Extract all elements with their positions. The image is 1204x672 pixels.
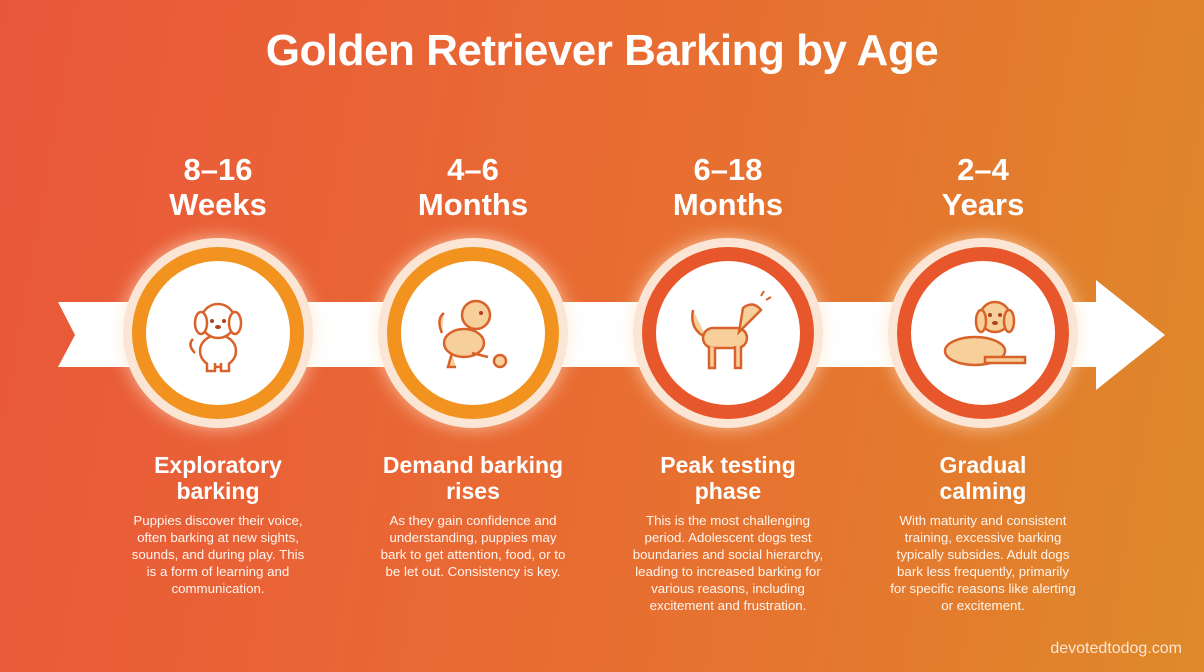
text 3: period. Adolescent dogs test [644,530,812,545]
heading 3: Peak testing [660,452,796,478]
text 2: understanding, puppies may [389,530,557,545]
heading 4: Gradual [940,452,1026,478]
text 1: sounds, and during play. This [132,547,304,562]
text 3: various reasons, including [651,581,805,596]
age label 3: Months [673,187,783,222]
text 1: often barking at new sights, [137,530,299,545]
age label 2: 4–6 [447,152,499,187]
heading 2: rises [446,478,500,504]
text 4: for specific reasons like alerting [890,581,1076,596]
heading 4: calming [940,478,1026,504]
text 4 [890,513,1076,613]
brand: devotedtodog.com [1050,640,1182,657]
circle 2: playing puppy [378,238,568,428]
age label 1: 8–16 [184,152,252,187]
circle 4: lying dog [888,238,1078,428]
text 1: Puppies discover their voice, [133,513,303,528]
age label 4: 2–4 [957,152,1009,187]
age label 3: 6–18 [694,152,762,187]
text 2: be let out. Consistency is key. [386,564,560,579]
age label 2: Months [418,187,528,222]
age label 4 [942,152,1024,222]
heading 3: phase [695,478,761,504]
heading 2: Demand barking [383,452,563,478]
title: Golden Retriever Barking by Age [266,26,938,75]
text 3: boundaries and social hierarchy, [633,547,823,562]
text 3 [633,513,823,613]
text 1 [132,513,304,596]
heading 1: Exploratory [154,452,282,478]
text 3: excitement and frustration. [650,598,806,613]
text 2 [381,513,565,579]
text 3: leading to increased barking for [635,564,821,579]
age label 3 [673,152,783,222]
text 1: is a form of learning and [147,564,289,579]
age label 1 [169,152,267,222]
heading 3 [660,452,796,504]
age label 4: Years [942,187,1024,222]
text 4: or excitement. [941,598,1025,613]
text 4: typically subsides. Adult dogs [897,547,1069,562]
heading 2 [383,452,563,504]
text 4: With maturity and consistent [899,513,1067,528]
heading 1 [154,452,282,504]
text 3: This is the most challenging [646,513,810,528]
circle 1: puppy [123,238,313,428]
text 2: bark to get attention, food, or to [381,547,565,562]
age label 2 [418,152,528,222]
heading 4 [940,452,1026,504]
text 2: As they gain confidence and [389,513,557,528]
age label 1: Weeks [169,187,267,222]
text 4: bark less frequently, primarily [897,564,1069,579]
heading 1: barking [176,478,260,504]
text 4: training, excessive barking [905,530,1061,545]
circle 3: alert dog [633,238,823,428]
text 1: communication. [171,581,265,596]
